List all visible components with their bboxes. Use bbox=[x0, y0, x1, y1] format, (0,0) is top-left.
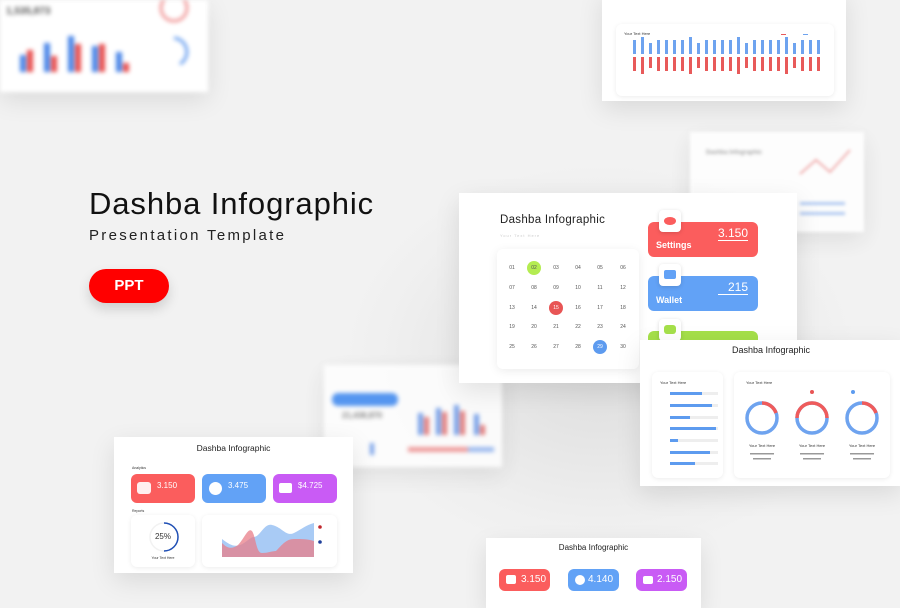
PPT button bbox=[89, 269, 169, 303]
icon: coins bbox=[659, 319, 681, 341]
calendar card bbox=[497, 249, 639, 369]
card: donuts: Your Text Here bbox=[799, 443, 826, 448]
card: wallet: Wallet bbox=[656, 295, 682, 305]
slide: analytics dashboard bbox=[114, 437, 353, 573]
calendar card: 24 bbox=[620, 324, 626, 330]
slide: bottom stats: Dashba Infographic bbox=[559, 543, 628, 552]
calendar card: 13 bbox=[509, 305, 515, 311]
slide: analytics dashboard: Reports bbox=[132, 509, 144, 513]
calendar card: 14 bbox=[531, 305, 537, 311]
slide: bottom stats bbox=[486, 538, 701, 608]
icon: wallet bbox=[659, 264, 681, 286]
card: purple stat: 2.150 bbox=[657, 574, 682, 585]
calendar card: 05 bbox=[597, 265, 603, 271]
calendar card: 22 bbox=[575, 324, 581, 330]
card: horizontal bars bbox=[652, 372, 723, 478]
calendar card: 02 bbox=[531, 265, 537, 271]
card: purple stat: $4.725 bbox=[298, 481, 322, 490]
card: settings: 3.150 bbox=[718, 226, 748, 240]
calendar card: 09 bbox=[553, 285, 559, 291]
slide: donut dashboard bbox=[640, 340, 900, 486]
chart card bbox=[616, 24, 834, 96]
card: percent gauge bbox=[131, 515, 195, 567]
card: settings: Settings bbox=[656, 240, 692, 250]
card: red stat: 3.150 bbox=[521, 574, 546, 585]
calendar card: 21 bbox=[553, 324, 559, 330]
calendar card: 17 bbox=[597, 305, 603, 311]
heading blurred: 1,535,873 bbox=[6, 6, 50, 17]
slide: right blurred line chart bbox=[690, 132, 864, 232]
slide: donut dashboard: Dashba Infographic bbox=[732, 345, 810, 355]
calendar card: 30 bbox=[620, 344, 626, 350]
icon: piggy bank bbox=[659, 210, 681, 232]
card: blue stat bbox=[202, 474, 266, 503]
calendar card: 15 bbox=[553, 305, 559, 311]
card: donuts bbox=[734, 372, 890, 478]
calendar card: 10 bbox=[575, 285, 581, 291]
PPT button: PPT bbox=[114, 277, 144, 294]
calendar card: 27 bbox=[553, 344, 559, 350]
calendar card: 11 bbox=[597, 285, 603, 291]
chart card: Your Text Here bbox=[624, 31, 650, 36]
slide: top-right column chart bbox=[602, 0, 846, 101]
card: blue stat: 3.475 bbox=[228, 481, 248, 490]
card: red stat bbox=[131, 474, 195, 503]
slide title: Dashba Infographic bbox=[500, 214, 605, 226]
card: settings bbox=[648, 222, 758, 257]
slide: analytics dashboard: Analytics bbox=[132, 466, 146, 470]
calendar card: 16 bbox=[575, 305, 581, 311]
main title: Dashba Infographic bbox=[89, 186, 374, 221]
card: percent gauge: 25% bbox=[155, 532, 171, 541]
calendar card: 18 bbox=[620, 305, 626, 311]
calendar card: 23 bbox=[597, 324, 603, 330]
card: donuts: Your Text Here bbox=[749, 443, 776, 448]
slide: middle blurred: 21,438,870 bbox=[342, 411, 382, 420]
card: area chart bbox=[202, 515, 337, 567]
card: blue stat: 4.140 bbox=[588, 574, 613, 585]
calendar card: 29 bbox=[597, 344, 603, 350]
calendar card: 28 bbox=[575, 344, 581, 350]
card: blue stat bbox=[568, 569, 619, 591]
calendar card: 01 bbox=[509, 265, 515, 271]
subtitle: Presentation Template bbox=[89, 227, 286, 244]
calendar card: 03 bbox=[553, 265, 559, 271]
calendar card: 26 bbox=[531, 344, 537, 350]
card: percent gauge: Your Text Here bbox=[152, 556, 174, 560]
slide: analytics dashboard: Dashba Infographic bbox=[197, 443, 270, 453]
calendar card: 19 bbox=[509, 324, 515, 330]
calendar card: 12 bbox=[620, 285, 626, 291]
slide: top-left blurred bar chart bbox=[0, 0, 208, 92]
calendar card: 20 bbox=[531, 324, 537, 330]
card: wallet bbox=[648, 276, 758, 311]
card: donuts: Your Text Here bbox=[849, 443, 876, 448]
slide: calendar dashboard: Your Text Here bbox=[500, 233, 540, 238]
card: red stat: 3.150 bbox=[157, 481, 177, 490]
slide: calendar dashboard bbox=[459, 193, 797, 383]
calendar card: 07 bbox=[509, 285, 515, 291]
slide: right blurred line chart: Dashba Infographic bbox=[706, 150, 762, 156]
card: horizontal bars: Your Text Here bbox=[660, 380, 686, 385]
calendar card: 06 bbox=[620, 265, 626, 271]
calendar card: 08 bbox=[531, 285, 537, 291]
card: purple stat bbox=[636, 569, 687, 591]
card: purple stat bbox=[273, 474, 337, 503]
calendar card: 04 bbox=[575, 265, 581, 271]
card: red stat bbox=[499, 569, 550, 591]
bar chart blurred bbox=[16, 0, 192, 76]
card: wallet: 215 bbox=[728, 280, 748, 294]
card: green bbox=[648, 331, 758, 366]
card: donuts: Your Text Here bbox=[746, 380, 772, 385]
calendar card: 25 bbox=[509, 344, 515, 350]
slide: middle blurred bbox=[324, 365, 502, 467]
